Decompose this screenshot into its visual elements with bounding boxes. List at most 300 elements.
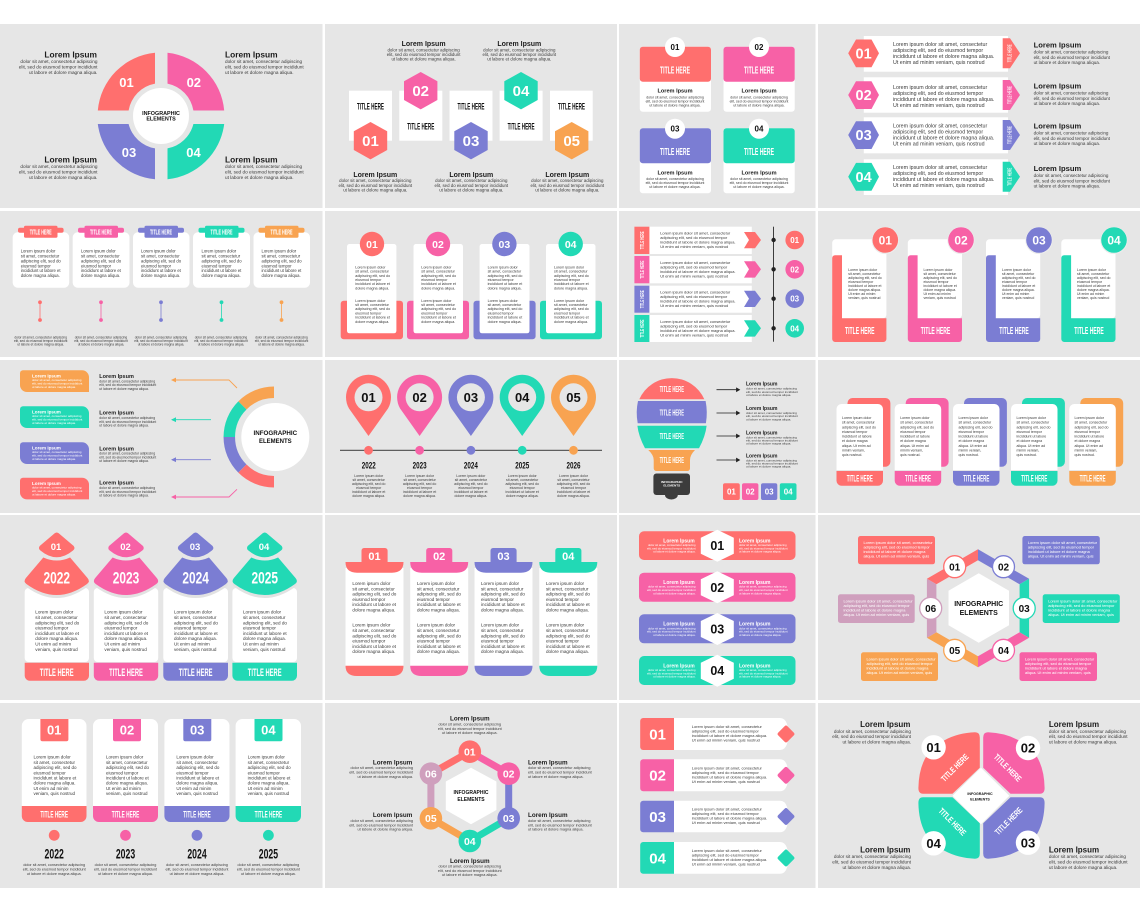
text boxes: adipiscing elit, sed do eiusmod tempor — [866, 661, 933, 666]
tag text: elit, sed do eiusmod tempor incididunt — [32, 454, 83, 458]
labels: ut labore et dolore magna aliqua. — [842, 865, 911, 870]
card text: sit amet, consectetur — [176, 760, 218, 765]
card text: eiusmod tempor — [1074, 430, 1101, 434]
card text: eiusmod tempor — [202, 263, 232, 268]
card 02 — [724, 37, 795, 112]
card text: eiusmod tempor — [488, 278, 514, 282]
card text: dolore magna aliqua. — [104, 636, 147, 641]
row 01: ut labore et dolore magna aliqua. — [1034, 60, 1100, 65]
card text: dolore magna aliqua. — [202, 273, 241, 278]
card 02: Lorem Ipsum — [741, 89, 777, 95]
card text: et dolore magna — [842, 439, 868, 443]
card 01: 01 — [879, 233, 892, 247]
number circles: 01 — [926, 740, 941, 755]
card text: eiusmod tempor — [546, 639, 579, 644]
card text: quis nostrud. — [1074, 453, 1095, 457]
card text: veniam, quis nostrud — [176, 791, 218, 796]
labels: elit, sed do eiusmod tempor incididunt — [438, 869, 503, 873]
text boxes: adipiscing elit, sed do eiusmod tempor — [1048, 603, 1115, 608]
card text: incididunt ut labore et — [104, 631, 149, 636]
number circles: 02 — [1021, 741, 1035, 756]
card text: dolore magna aliqua. — [546, 649, 589, 654]
card text: eiusmod tempor — [248, 770, 280, 775]
card 02: elit, sed do eiusmod tempor incididunt — [730, 99, 788, 103]
card text: dolore magna aliqua. — [421, 286, 455, 290]
row 04: ut labore et dolore magna aliqua. — [653, 675, 696, 679]
card 02: incididunt ut labore et — [924, 284, 957, 288]
row 03: elit, sed do eiusmod tempor incididunt — [647, 630, 696, 634]
row text: incididunt ut labore et dolore magna aliqua. — [660, 299, 736, 304]
row 01: elit, sed do eiusmod tempor incididunt — [739, 546, 788, 550]
labels: Lorem Ipsum — [450, 858, 490, 865]
title bars — [25, 663, 297, 681]
card 01: dolore magna aliqua. — [848, 288, 881, 292]
card text: dolore magna aliqua. — [488, 286, 522, 290]
text: bottom labels: Lorem Ipsum — [545, 172, 589, 179]
number tabs: 01 — [47, 723, 61, 738]
card text: eiusmod tempor — [554, 278, 581, 282]
panel: five stacked cards — [818, 360, 1140, 513]
card 04 — [724, 119, 795, 193]
row 03: Lorem Ipsum — [1034, 122, 1082, 130]
row 03: ut labore et dolore magna aliqua. — [1034, 141, 1100, 146]
card text: Lorem ipsum dolor — [554, 299, 585, 303]
text: top labels: Lorem Ipsum — [497, 41, 541, 48]
labels: elit, sed do eiusmod tempor incididunt — [528, 823, 593, 827]
card text: sit amet, consectetur — [554, 303, 588, 307]
years: 2025 — [259, 846, 278, 862]
text boxes: aliqua. Ut enim ad minim veniam, quis — [866, 670, 932, 675]
card 01: Ut enim ad minim — [848, 292, 876, 296]
card titles: TITLE HERE — [357, 101, 384, 112]
row text: Lorem ipsum dolor sit amet, consectetur — [660, 319, 731, 324]
text boxes: incididunt ut labore et dolore magna — [1028, 549, 1091, 554]
row 01: Ut enim ad minim veniam, quis nostrud — [893, 60, 985, 66]
number tabs: 02 — [120, 723, 134, 738]
text boxes: incididunt ut labore et dolore magna — [1048, 607, 1111, 612]
card text: aliqua. Ut enim ad — [958, 444, 987, 448]
card text: quis nostrud. — [900, 453, 921, 457]
connecting strokes — [431, 752, 509, 841]
side text: elit, sed do eiusmod tempor incididunt — [99, 383, 156, 387]
row 03: 03 — [649, 809, 666, 826]
row 01 — [640, 718, 795, 750]
bulb — [637, 378, 707, 471]
row 04: Lorem ipsum dolor sit amet, consectetur — [893, 165, 987, 171]
row 04: TITLE HERE — [1008, 168, 1014, 186]
text boxes: incididunt ut labore et dolore magna — [1025, 665, 1088, 670]
captions: dolor sit amet, consectetur adipiscing — [95, 863, 156, 867]
panel: cards on coloured trays — [325, 211, 617, 357]
white cards — [25, 588, 297, 662]
text boxes: aliqua. Ut enim ad minim veniam, quis — [864, 554, 929, 558]
captions: eiusmod tempor — [561, 486, 587, 490]
card text: minim veniam, — [958, 448, 981, 452]
row 03: elit, sed do eiusmod tempor incididunt — [739, 630, 788, 634]
headers and tabs — [346, 548, 597, 573]
text: bottom labels: Lorem Ipsum — [449, 172, 493, 179]
labels: ut labore et dolore magna aliqua. — [442, 731, 498, 735]
card text: Lorem ipsum dolor — [104, 610, 143, 615]
back sheets — [848, 398, 1123, 467]
centre hexagon: INFOGRAPHIC — [954, 601, 1003, 608]
ring — [229, 392, 274, 482]
card text: dolore magna aliqua. — [355, 286, 389, 290]
card text: adipiscing elit, sed do — [262, 258, 302, 263]
tag text: dolor sit amet, consectetur adipiscing — [32, 414, 82, 418]
card text: sit amet, consectetur — [842, 421, 876, 425]
card text: dolore magna aliqua. — [554, 286, 588, 290]
centre hexagon: ELEMENTS — [960, 610, 998, 617]
petals: TITLE HERE — [937, 806, 969, 838]
tag text: elit, sed do eiusmod tempor incididunt — [32, 382, 83, 386]
row 04: dolor sit amet, consectetur adipiscing — [739, 668, 787, 672]
captions: elit, sed do eiusmod tempor incididunt — [94, 868, 158, 872]
white bars — [649, 227, 752, 342]
labels — [349, 716, 593, 877]
card text: adipiscing elit, sed do — [243, 620, 287, 625]
card 01: eiusmod tempor — [848, 280, 874, 284]
card text: Lorem ipsum dolor — [1016, 416, 1047, 420]
timeline — [340, 446, 602, 455]
card text: Lorem ipsum dolor — [842, 416, 872, 420]
card text: incididunt ut labore et — [421, 316, 456, 320]
card text: sit amet, consectetur — [481, 586, 524, 591]
captions: sit amet, consectetur — [353, 478, 386, 482]
donut chart — [98, 53, 224, 179]
card text: incididunt ut labore et — [488, 316, 522, 320]
row 04 — [640, 842, 795, 874]
row 04: dolor sit amet, consectetur adipiscing — [648, 668, 696, 672]
card text: incididunt ut labore — [1074, 435, 1104, 439]
row 04: Lorem Ipsum — [663, 663, 695, 669]
card text: adipiscing elit, sed do — [481, 633, 525, 638]
card text: incididunt ut labore et — [421, 282, 456, 286]
row 01: dolor sit amet, consectetur adipiscing — [1034, 50, 1109, 54]
card text: dolore magna aliqua. — [248, 781, 290, 786]
row 01: adipiscing elit, sed do eiusmod tempor — [893, 48, 983, 54]
card 03: veniam, quis nostrud — [1002, 296, 1034, 300]
bulb: TITLE HERE — [660, 385, 684, 394]
labels: ut labore et dolore magna aliqua. — [746, 393, 791, 397]
card text: adipiscing elit, sed do — [202, 258, 242, 263]
card text: sit amet, consectetur — [355, 303, 390, 307]
title bars — [836, 471, 1116, 486]
captions — [23, 863, 301, 876]
card text: Ut enim ad minim — [106, 786, 141, 791]
card 02: Lorem ipsum dolor — [924, 268, 953, 272]
bottom bands — [346, 666, 597, 676]
card 04: adipiscing elit, sed do — [1077, 276, 1111, 280]
row 02 — [848, 77, 1111, 113]
fan 04: 04 — [259, 542, 270, 553]
card 01: incididunt ut labore et — [848, 284, 881, 288]
headers and tabs: 04 — [562, 551, 575, 563]
years: 2023 — [413, 460, 427, 472]
row 01: Lorem Ipsum — [1034, 40, 1082, 50]
card text: dolore magna aliqua. — [243, 636, 286, 641]
captions: incididunt ut labore et — [352, 490, 385, 494]
card text: dolore magna aliqua. — [421, 320, 455, 324]
text: bottom labels: dolor sit amet, consectetur adipiscing — [531, 178, 604, 183]
row 03 — [848, 117, 1111, 153]
card text: Lorem ipsum dolor — [81, 248, 116, 253]
hexagon badges: 04 — [513, 83, 530, 100]
card 02: veniam, quis nostrud — [924, 296, 956, 300]
row 01: incididunt ut labore et dolore magna aliqua. — [893, 54, 994, 60]
card text: veniam, quis nostrud — [174, 647, 217, 652]
card text: eiusmod tempor — [106, 770, 139, 775]
donut chart: 02 — [187, 75, 201, 90]
card text — [35, 610, 287, 652]
card 04: Lorem Ipsum — [741, 170, 777, 176]
tag text: ut labore et dolore magna aliqua. — [32, 421, 76, 425]
captions: adipiscing elit, sed do — [352, 482, 385, 486]
card text: Ut enim ad minim — [174, 642, 210, 646]
row 01 — [639, 530, 796, 562]
card text: Lorem ipsum dolor — [958, 416, 989, 420]
number circles: 03 — [790, 295, 800, 304]
card text: sit amet, consectetur — [900, 421, 934, 425]
card text: incididunt ut labore et — [21, 268, 61, 273]
petals: TITLE HERE — [993, 805, 1025, 837]
row text: adipiscing elit, sed do eiusmod tempor — [660, 324, 728, 329]
petals: TITLE HERE — [939, 752, 971, 784]
row 02: elit, sed do eiusmod tempor incididunt — [739, 588, 788, 592]
card text: adipiscing elit, sed do — [1016, 425, 1050, 429]
card 02: TITLE HERE — [744, 66, 774, 76]
labels: elit, sed do eiusmod tempor incididunt — [349, 771, 414, 775]
row 03: incididunt ut labore et dolore magna aliqua. — [893, 136, 994, 142]
text boxes: Lorem ipsum dolor sit amet, consectetur — [844, 598, 913, 603]
labels: dolor sit amet, consectetur adipiscing — [1049, 729, 1126, 734]
bottom captions: ut labore et dolore magna aliqua. — [258, 342, 305, 346]
card text: Lorem ipsum dolor — [141, 248, 176, 253]
number nodes: 02 — [998, 562, 1009, 573]
text: label 01: dolor sit amet, consectetur adipiscing — [20, 59, 98, 64]
card text: adipiscing elit, sed do — [81, 258, 122, 263]
text boxes: aliqua. Ut enim ad minim veniam, quis — [1025, 670, 1091, 675]
card text: eiusmod tempor — [141, 263, 172, 268]
labels: ut labore et dolore magna aliqua. — [1049, 739, 1117, 744]
card text: Lorem ipsum dolor — [35, 610, 74, 615]
row 04: adipiscing elit, sed do eiusmod tempor — [893, 171, 983, 177]
card text: eiusmod tempor — [34, 770, 66, 775]
text boxes: incididunt ut labore et dolore magna — [864, 549, 926, 554]
card text: Lorem ipsum dolor — [417, 581, 456, 586]
labels: ut labore et dolore magna aliqua. — [528, 828, 584, 832]
text: label 02: ut labore et dolore magna aliqua. — [225, 70, 294, 75]
labels: dolor sit amet, consectetur adipiscing — [746, 387, 797, 391]
number nodes: 01 — [949, 562, 961, 573]
card 02: dolor sit amet, consectetur adipiscing — [730, 95, 788, 99]
connector dots — [38, 300, 283, 322]
card 03: TITLE HERE — [999, 326, 1029, 337]
card text: adipiscing elit, sed do — [546, 633, 590, 638]
card text: adipiscing elit, sed do — [421, 274, 456, 278]
bottom captions: elit, sed do eiusmod tempor incididunt — [74, 339, 128, 343]
text: label 02: Lorem Ipsum — [225, 50, 278, 60]
tag text: ut labore et dolore magna aliqua. — [32, 493, 76, 497]
card text: eiusmod tempor — [421, 278, 448, 282]
card 04: Lorem ipsum dolor — [1077, 268, 1107, 272]
card text: sit amet, consectetur — [546, 586, 589, 591]
card text: sit amet, consectetur — [243, 615, 286, 620]
card text: eiusmod tempor — [481, 597, 514, 602]
labels: elit, sed do eiusmod tempor incididunt — [528, 771, 593, 775]
card 03: adipiscing elit, sed do — [1002, 276, 1036, 280]
card text: incididunt ut labore et — [202, 268, 242, 273]
row 01: Lorem Ipsum — [663, 538, 695, 544]
title bars: TITLE HERE — [1021, 473, 1047, 483]
row 04: 04 — [710, 664, 724, 678]
labels: dolor sit amet, consectetur adipiscing — [439, 722, 501, 726]
row text: incididunt ut labore et dolore magna aliqua. — [660, 240, 736, 245]
number nodes — [920, 556, 1035, 661]
row 03: 03 — [710, 622, 724, 636]
number squares — [723, 483, 796, 500]
card text: quis nostrud. — [842, 453, 862, 457]
number tabs — [40, 719, 283, 741]
text: label 03: elit, sed do eiusmod tempor incididunt — [19, 170, 98, 174]
row 04: 04 — [856, 170, 872, 186]
labels: elit, sed do eiusmod tempor incididunt — [1049, 734, 1128, 739]
row 01: incididunt ut labore et dolore magna aliqua. — [692, 733, 767, 738]
row 01: Lorem Ipsum — [739, 538, 771, 544]
card text: incididunt ut labore et — [546, 644, 590, 649]
card 04: veniam, quis nostrud — [1077, 296, 1109, 300]
card 04: ut labore et dolore magna aliqua. — [733, 185, 785, 189]
white sheets — [836, 404, 1116, 470]
tag text — [32, 374, 83, 497]
card text: aliqua. Ut enim ad — [1074, 444, 1103, 448]
captions — [352, 474, 590, 498]
card text: incididunt ut labore et — [352, 644, 397, 649]
ring centre — [241, 403, 309, 471]
card text: incididunt ut labore et — [554, 316, 589, 320]
card text: sit amet, consectetur — [421, 270, 456, 274]
captions: eiusmod tempor — [458, 486, 484, 490]
card text: eiusmod tempor — [355, 311, 382, 315]
number nodes: 05 — [949, 646, 961, 657]
captions: elit, sed do eiusmod tempor incididunt — [23, 868, 87, 872]
row 02: ut labore et dolore magna aliqua. — [1034, 101, 1100, 106]
row text: Ut enim ad minim veniam, quis nostrud — [660, 333, 728, 338]
card 01: adipiscing elit, sed do — [848, 276, 882, 280]
card text — [355, 265, 589, 324]
side text: dolor sit amet, consectetur adipiscing — [99, 416, 155, 420]
title cards — [349, 91, 593, 141]
row 04: Ut enim ad minim veniam, quis nostrud — [893, 183, 985, 189]
side text: Lorem Ipsum — [99, 374, 134, 380]
fan 01: 01 — [51, 542, 62, 553]
card text: eiusmod tempor — [243, 626, 276, 631]
labels: dolor sit amet, consectetur adipiscing — [746, 411, 797, 415]
row text: adipiscing elit, sed do eiusmod tempor — [660, 294, 728, 299]
card text: Lorem ipsum dolor — [417, 623, 456, 628]
card text: sit amet, consectetur — [958, 421, 992, 425]
tag text: Lorem Ipsum — [32, 481, 61, 486]
card text: eiusmod tempor — [174, 626, 207, 631]
row 04: elit, sed do eiusmod tempor incididunt — [1034, 178, 1111, 183]
text: top labels — [387, 41, 557, 62]
card text: sit amet, consectetur — [421, 303, 456, 307]
text: bottom labels — [338, 172, 605, 193]
side text: dolor sit amet, consectetur adipiscing — [99, 379, 155, 383]
headers and tabs: 03 — [497, 551, 510, 563]
labels: Lorem Ipsum — [860, 720, 910, 729]
row 01: 01 — [649, 726, 666, 743]
card text: dolore magna aliqua. — [106, 781, 148, 786]
card text: incididunt ut labore et — [141, 268, 182, 273]
card 01: elit, sed do eiusmod tempor incididunt — [646, 99, 704, 103]
text: top labels: ut labore et dolore magna aliqua. — [391, 57, 456, 62]
panel: four title cards — [619, 24, 816, 208]
row 04: incididunt ut labore et dolore magna aliqua. — [692, 857, 767, 862]
number nodes: 06 — [425, 768, 437, 780]
number circles: 03 — [499, 239, 510, 251]
card text: veniam, quis nostrud — [104, 647, 147, 652]
row 02: 02 — [856, 88, 872, 104]
card 03: dolor sit amet, consectetur adipiscing — [646, 177, 704, 181]
captions: elit, sed do eiusmod tempor incididunt — [237, 868, 301, 872]
number squares: 03 — [765, 488, 774, 496]
bottom captions: elit, sed do eiusmod tempor incididunt — [194, 339, 248, 343]
text: bottom labels: elit, sed do eiusmod tempor incididunt — [530, 183, 605, 188]
card 04: Ut enim ad minim — [1077, 292, 1104, 296]
donut chart: 04 — [186, 145, 201, 160]
row 02: Lorem Ipsum — [1034, 82, 1082, 90]
card text: Ut enim ad minim — [34, 786, 69, 791]
white cards — [347, 244, 596, 333]
card text: Lorem ipsum dolor — [355, 299, 386, 303]
card 04: incididunt ut labore et — [1077, 284, 1110, 288]
row 04: incididunt ut labore et dolore magna aliqua. — [893, 177, 994, 183]
card text: eiusmod tempor — [262, 263, 292, 268]
card text: incididunt ut labore et — [481, 644, 525, 649]
pins: 01 — [361, 390, 376, 405]
side text: elit, sed do eiusmod tempor incididunt — [99, 490, 156, 494]
row 04: 04 — [649, 850, 667, 867]
card text: eiusmod tempor — [421, 311, 448, 315]
card text: Lorem ipsum dolor — [1074, 416, 1105, 420]
row 02: adipiscing elit, sed do eiusmod tempor — [893, 91, 983, 97]
card text: eiusmod tempor — [546, 597, 579, 602]
row 02: elit, sed do eiusmod tempor incididunt — [647, 588, 696, 592]
row 01: 01 — [856, 46, 872, 62]
side text: elit, sed do eiusmod tempor incididunt — [99, 420, 156, 424]
title bars: TITLE HERE — [112, 809, 139, 820]
row text: incididunt ut labore et dolore magna aliqua. — [660, 269, 736, 274]
card text: dolore magna aliqua. — [81, 273, 120, 278]
card text: incididunt ut labore — [958, 435, 988, 439]
bottom captions: dolor sit amet, consectetur adipiscing — [255, 336, 308, 340]
card text: incididunt ut labore et — [248, 776, 291, 780]
captions: ut labore et dolore magna aliqua. — [98, 872, 153, 876]
row 03: ut labore et dolore magna aliqua. — [739, 633, 781, 637]
fan 03: 2024 — [182, 568, 209, 587]
row 03: Ut enim ad minim veniam, quis nostrud — [692, 820, 760, 825]
row 03: adipiscing elit, sed do eiusmod tempor — [893, 130, 983, 136]
pins: 03 — [464, 390, 478, 405]
card text: incididunt ut labore et — [34, 776, 77, 780]
bottom captions: ut labore et dolore magna aliqua. — [138, 342, 184, 346]
bottom captions: elit, sed do eiusmod tempor incididunt — [134, 339, 188, 343]
card text: eiusmod tempor — [81, 263, 112, 268]
bulb base — [653, 474, 690, 500]
white bodies — [346, 568, 597, 666]
captions: sit amet, consectetur — [557, 478, 590, 482]
